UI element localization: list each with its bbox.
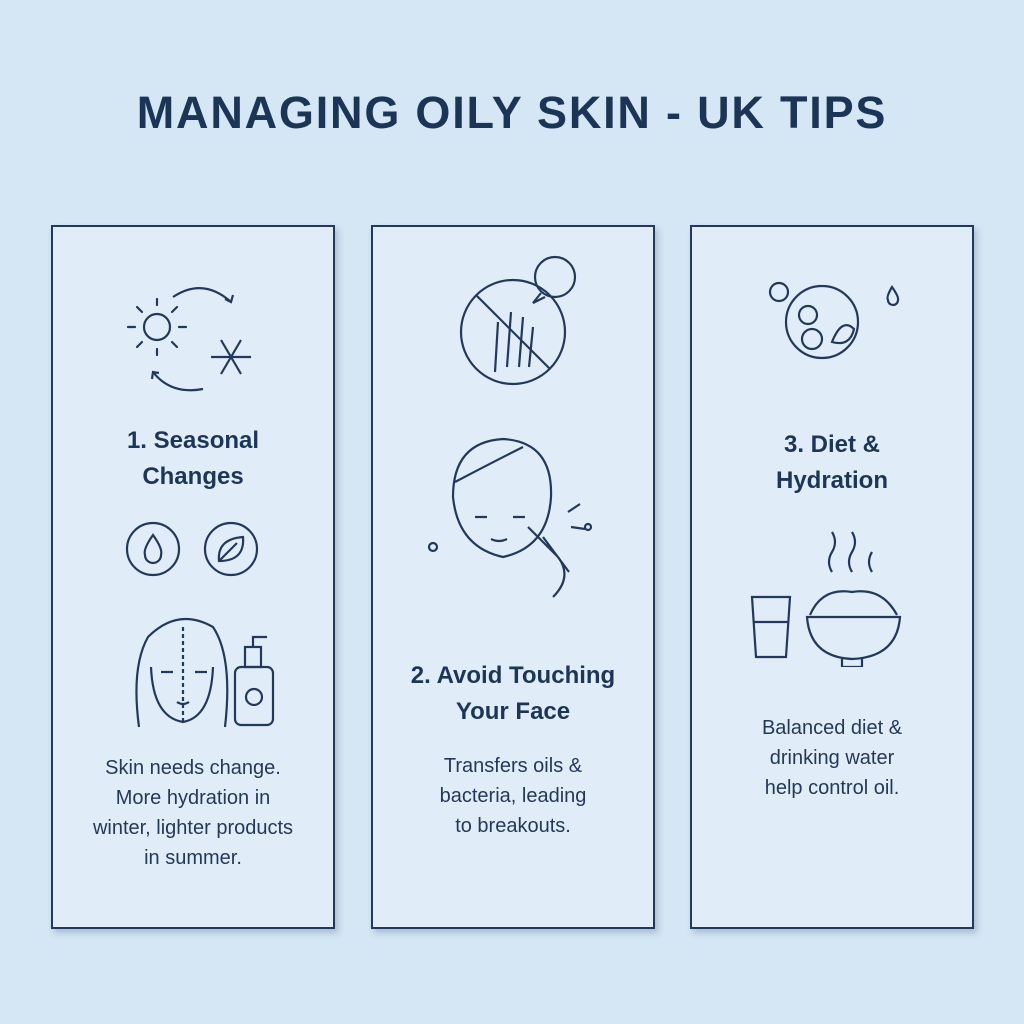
body text [93,757,293,869]
title: MANAGING OILY SKIN - UK TIPS [137,87,887,138]
icon: sun and snow cycle [126,287,251,392]
body text: Balanced diet & [762,717,902,739]
body text: drinking water [770,747,894,769]
panel: avoid touching [371,225,655,929]
heading: Hydration [776,467,888,494]
body text: to breakouts. [455,815,571,837]
body text: bacteria, leading [440,785,586,807]
body text [440,755,586,837]
icons: drop and leaf [126,522,258,576]
heading: Your Face [456,698,570,725]
heading [411,662,615,725]
body text: More hydration in [116,787,270,809]
heading: 1. Seasonal [127,427,259,454]
panel: seasonal changes [51,225,335,929]
illustration: face and bottle [135,618,274,728]
heading [127,427,259,490]
illustration: face being touched [453,439,551,557]
heading: 2. Avoid Touching [411,662,615,689]
icon: plate of food [750,282,902,667]
body text: in summer. [144,847,242,869]
body text: Transfers oils & [444,755,582,777]
body text: Skin needs change. [105,757,281,779]
illustration: water glass and salad bowl [752,597,790,657]
body text [762,717,902,799]
heading: Changes [142,463,244,490]
body text: help control oil. [765,777,899,799]
heading: 3. Diet & [784,431,880,458]
heading [776,431,888,494]
body text: winter, lighter products [93,817,293,839]
icon: no touching [428,256,592,598]
panel: diet [690,225,974,929]
